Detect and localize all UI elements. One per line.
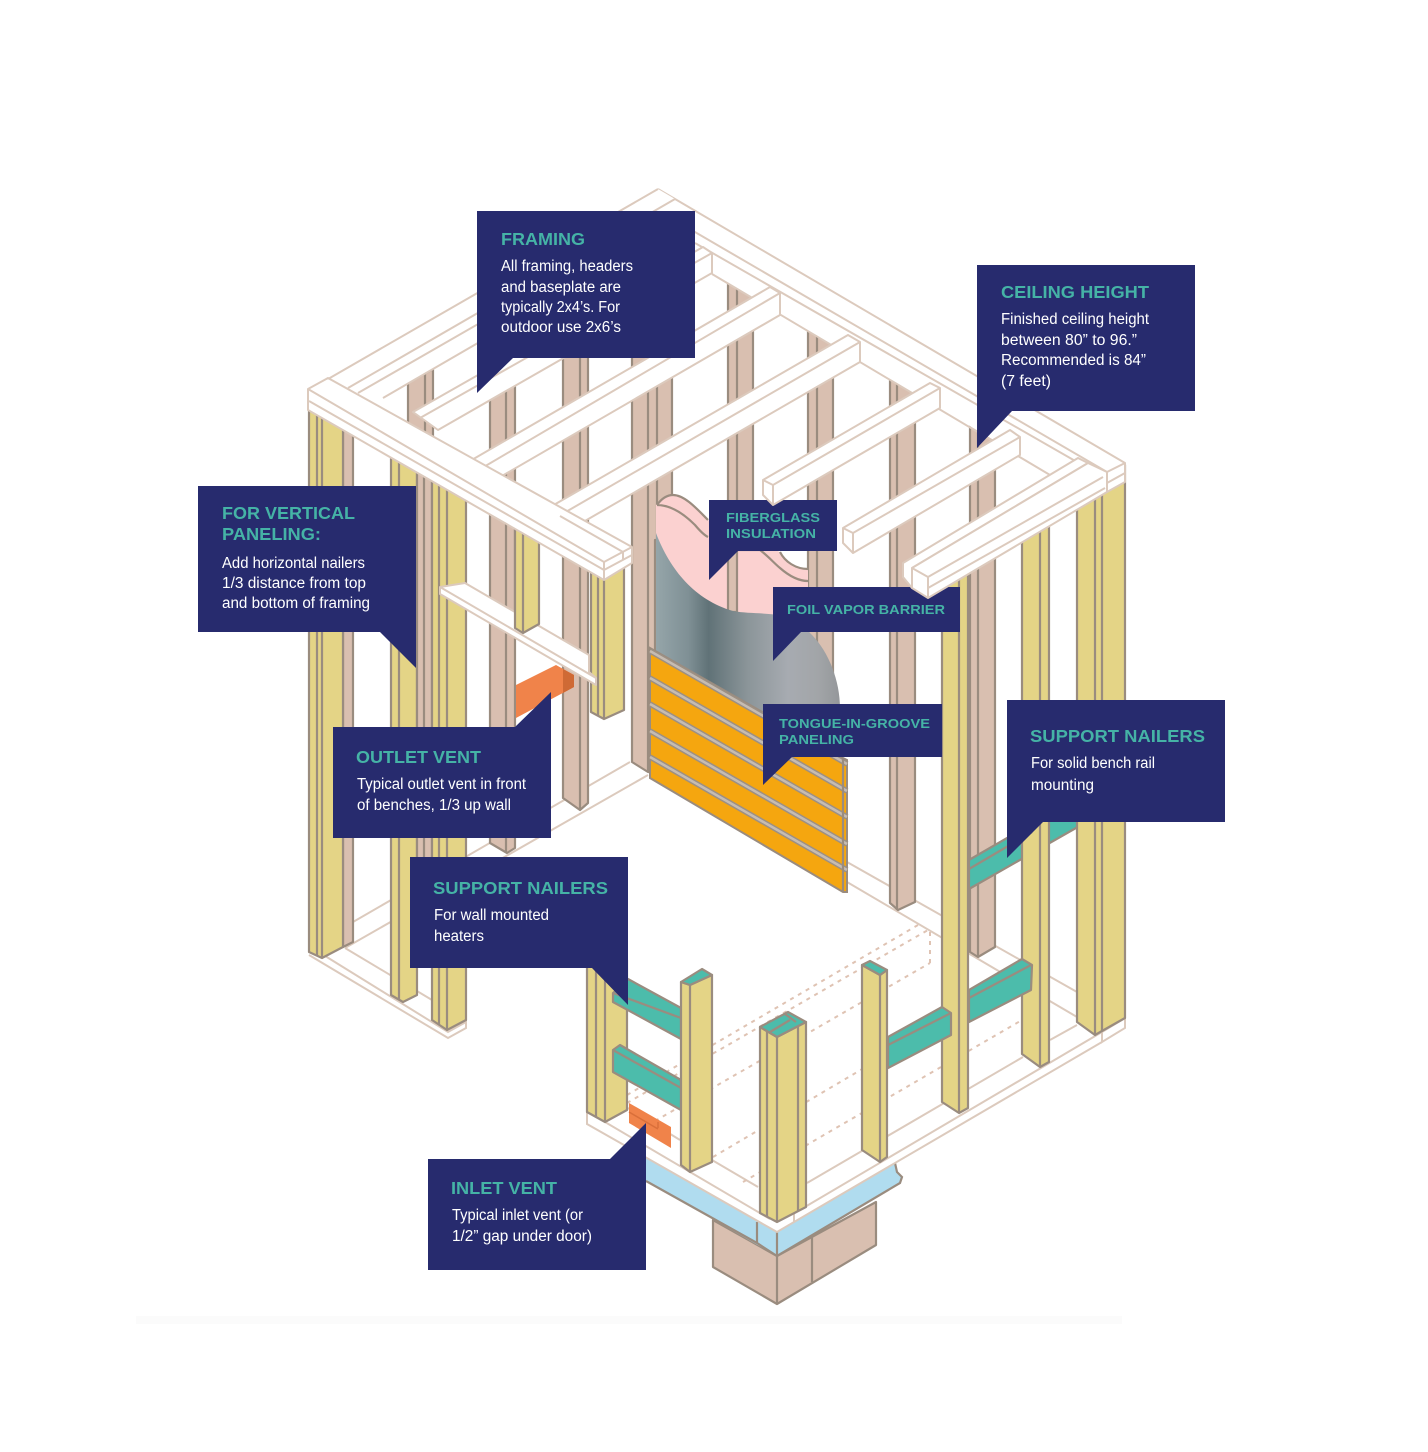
inlet vent — [629, 1103, 671, 1148]
ceiling heading: CEILING HEIGHT — [1001, 282, 1149, 302]
teal nailer right lower — [969, 959, 1032, 1022]
bench body: For solid bench rail — [1031, 755, 1155, 772]
outlet box — [333, 692, 551, 838]
ceiling body: Finished ceiling height — [1001, 311, 1150, 328]
right wall stud F7 — [1077, 465, 1125, 1035]
tongue-in-groove paneling — [650, 648, 847, 892]
inlet body: 1/2” gap under door) — [452, 1228, 592, 1245]
short yellow stud — [515, 510, 539, 633]
callout: fiberglass insulation — [709, 500, 837, 580]
paneling body: 1/3 distance from top — [222, 575, 366, 592]
tongue label — [779, 716, 930, 747]
left wall yellow stud, corner — [309, 400, 353, 958]
framing body: and baseplate are — [501, 279, 621, 296]
teal nailer middle — [888, 1007, 951, 1068]
front floor plate — [587, 1025, 1102, 1232]
outlet body: of benches, 1/3 up wall — [357, 797, 511, 814]
fiberglass box — [709, 500, 837, 580]
foil label: FOIL VAPOR BARRIER — [787, 602, 946, 617]
door stud F2 — [681, 969, 712, 1172]
callout: vertical paneling — [198, 486, 416, 668]
callout: ceiling height — [977, 265, 1195, 448]
paneling heading: FOR VERTICAL — [222, 503, 355, 523]
corner stud F3 — [760, 1012, 806, 1222]
framing box — [477, 211, 695, 393]
horizontal nailer — [440, 583, 596, 685]
blue floor membrane — [646, 1156, 902, 1256]
framing body: typically 2x4’s. For — [501, 299, 620, 316]
outlet body: Typical outlet vent in front — [357, 776, 527, 793]
tongue label: TONGUE-IN-GROOVE — [779, 716, 930, 731]
right front stud F4 — [862, 961, 887, 1162]
right wall stud F6 — [1022, 500, 1049, 1067]
ceiling joist 2 — [552, 335, 860, 525]
outlet body — [357, 776, 527, 814]
paneling body: and bottom of framing — [222, 595, 370, 612]
teal nailer upper right — [969, 790, 1090, 889]
heaters box — [410, 857, 628, 1005]
ceiling body: between 80” to 96.” — [1001, 332, 1137, 349]
teal nailer left lower — [613, 1045, 681, 1110]
callout: framing — [477, 211, 695, 393]
callout: support nailers heaters — [410, 857, 628, 1005]
callout: foil vapor barrier — [773, 587, 960, 661]
inlet heading: INLET VENT — [451, 1178, 557, 1198]
tongue box — [763, 704, 942, 785]
heaters body: For wall mounted — [434, 907, 549, 924]
paneling body — [222, 555, 370, 612]
ceiling body: (7 feet) — [1001, 373, 1051, 390]
paneling body: Add horizontal nailers — [222, 555, 365, 572]
framing body — [501, 258, 633, 336]
orange outlet vent — [516, 665, 574, 718]
ceiling: back-right top plate — [640, 189, 1125, 478]
right corner plate end — [1107, 463, 1125, 492]
inlet body: Typical inlet vent (or — [452, 1207, 583, 1224]
fiberglass label: FIBERGLASS — [726, 510, 820, 525]
fiberglass label — [726, 510, 820, 541]
teal nailer inner line upper — [969, 832, 1032, 869]
inlet body — [452, 1207, 592, 1245]
floor frame: bottom plates — [309, 762, 1125, 1042]
foil box — [773, 587, 960, 661]
left wall stud 2 — [391, 440, 417, 1002]
concrete pier — [713, 1202, 876, 1304]
ceiling body — [1001, 311, 1150, 390]
ceiling joist 4 — [843, 430, 1020, 553]
paneling heading — [222, 503, 355, 544]
fiberglass label: INSULATION — [726, 526, 816, 541]
ceiling joist 3 — [763, 383, 940, 505]
fiberglass insulation — [656, 495, 808, 640]
left wall stud 3 — [417, 450, 466, 1030]
front-left top plate — [308, 378, 632, 580]
short yellow stud near corner — [591, 560, 624, 719]
bench heading: SUPPORT NAILERS — [1030, 726, 1205, 746]
framing body: All framing, headers — [501, 258, 633, 275]
heaters body: heaters — [434, 928, 484, 945]
bench body: mounting — [1031, 777, 1094, 794]
foil vapor barrier — [656, 533, 840, 760]
ceiling joist 1 — [470, 287, 780, 480]
callout: inlet vent — [428, 1123, 646, 1270]
heaters heading: SUPPORT NAILERS — [433, 878, 608, 898]
bench body — [1031, 755, 1155, 794]
heaters body — [434, 907, 549, 945]
ceiling: back-left top plate — [309, 189, 675, 398]
framing body: outdoor use 2x6’s — [501, 319, 621, 336]
callout: support nailers bench — [1007, 700, 1225, 858]
door stud F1 — [587, 960, 627, 1122]
ceiling joist 5, double front — [903, 458, 1107, 598]
bench box — [1007, 700, 1225, 858]
bench outline: dashed lines — [627, 925, 1022, 1182]
paneling box — [198, 486, 416, 668]
framing heading: FRAMING — [501, 229, 585, 249]
back-left wall studs — [408, 232, 672, 853]
right wall stud F5 — [942, 555, 968, 1113]
inlet box — [428, 1123, 646, 1270]
back-right wall studs — [728, 282, 995, 957]
teal nailer left upper — [613, 979, 681, 1039]
paneling heading: PANELING: — [222, 524, 321, 544]
tongue label: PANELING — [779, 732, 854, 747]
callout: tongue-in-groove paneling — [763, 704, 942, 785]
ceiling joist 0 — [413, 247, 712, 430]
ceiling body: Recommended is 84” — [1001, 352, 1146, 369]
callout: outlet vent — [333, 692, 551, 838]
outlet heading: OUTLET VENT — [356, 747, 481, 767]
ceiling box — [977, 265, 1195, 448]
